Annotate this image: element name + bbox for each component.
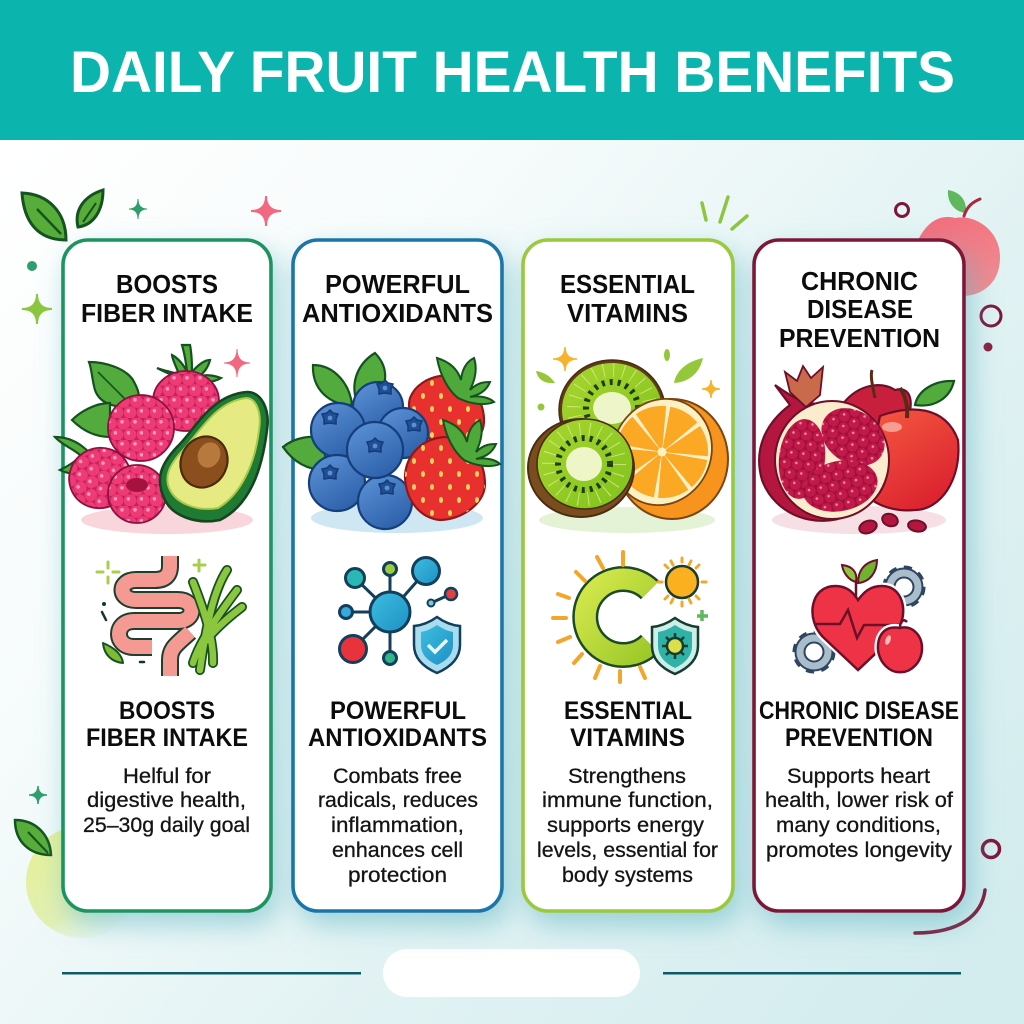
icon: heart, apple and gears [797,560,922,672]
heading top [560,269,695,328]
description: Supports heart [787,764,930,788]
heading top [779,266,940,353]
panel: powerful antioxidants [283,240,502,911]
icon: vitamin C, sun and shield [553,552,708,682]
heading top: ANTIOXIDANTS [302,298,493,328]
description: levels, essential for [537,838,718,862]
illustration: raspberries and avocado [55,345,268,534]
heading bottom: ESSENTIAL [564,697,692,725]
description: digestive health, [87,788,246,812]
orange half [595,382,729,522]
decoration: top-left leaves and sparkles [22,190,281,324]
decoration: bottom-left lime circle, leaf and sparkle [15,786,138,938]
description: Helful for [123,764,211,788]
heading bottom: BOOSTS [119,697,215,725]
description: protection [348,863,447,887]
description [765,764,953,862]
description: immune function, [542,788,713,812]
description: enhances cell [332,838,463,862]
card frame [63,240,271,911]
description: inflammation, [331,813,464,837]
heading top: CHRONIC [801,266,918,296]
decoration: apple and rings at right [896,190,1001,933]
footer rule right [663,972,961,974]
heading top: FIBER INTAKE [81,298,253,328]
description: supports energy [547,813,704,837]
title: DAILY FRUIT HEALTH BENEFITS [70,40,955,105]
kiwi front [528,419,634,517]
footer pill [383,949,640,997]
panel: essential vitamins [523,240,733,911]
icon: molecule and shield [340,558,460,673]
heading top: DISEASE [807,294,913,324]
heading top: VITAMINS [567,298,688,328]
description: radicals, reduces [318,788,478,812]
heading bottom: PREVENTION [785,724,933,752]
decoration: sun rays above vitamins card [702,197,747,229]
card frame [754,240,964,911]
illustration: blueberries and strawberries [283,353,500,533]
heading bottom: ANTIOXIDANTS [308,724,487,752]
panel: chronic disease prevention [754,240,964,911]
heading top: ESSENTIAL [560,269,695,299]
description: 25–30g daily goal [83,813,250,837]
description [537,764,718,887]
footer rule left [62,972,361,974]
heading bottom: FIBER INTAKE [86,724,248,752]
description: promotes longevity [766,838,952,862]
heading top: BOOSTS [116,269,218,299]
heading top [302,269,493,328]
card frame [293,240,502,911]
heading bottom: POWERFUL [330,697,466,725]
description: body systems [562,863,693,887]
heading top: POWERFUL [325,269,470,299]
description [83,764,250,837]
heading bottom [308,697,487,752]
heading bottom [564,697,692,752]
illustration: kiwi and orange [528,347,729,533]
description [318,764,478,887]
heading top [81,269,253,328]
heading bottom [86,697,248,752]
description: health, lower risk of [765,788,953,812]
description: many conditions, [776,813,941,837]
heading bottom [759,697,959,752]
heading top: PREVENTION [779,323,940,353]
illustration: pomegranate and apples [759,366,958,536]
kiwi back [559,360,665,460]
panel: boosts fiber intake [55,240,271,911]
card frame [523,240,733,911]
icon: intestine and fiber stalks [97,556,242,676]
heading bottom: CHRONIC DISEASE [759,697,959,725]
description: Strengthens [568,764,686,788]
heading bottom: VITAMINS [570,724,685,752]
header band [0,0,1024,140]
description: Combats free [333,764,462,788]
